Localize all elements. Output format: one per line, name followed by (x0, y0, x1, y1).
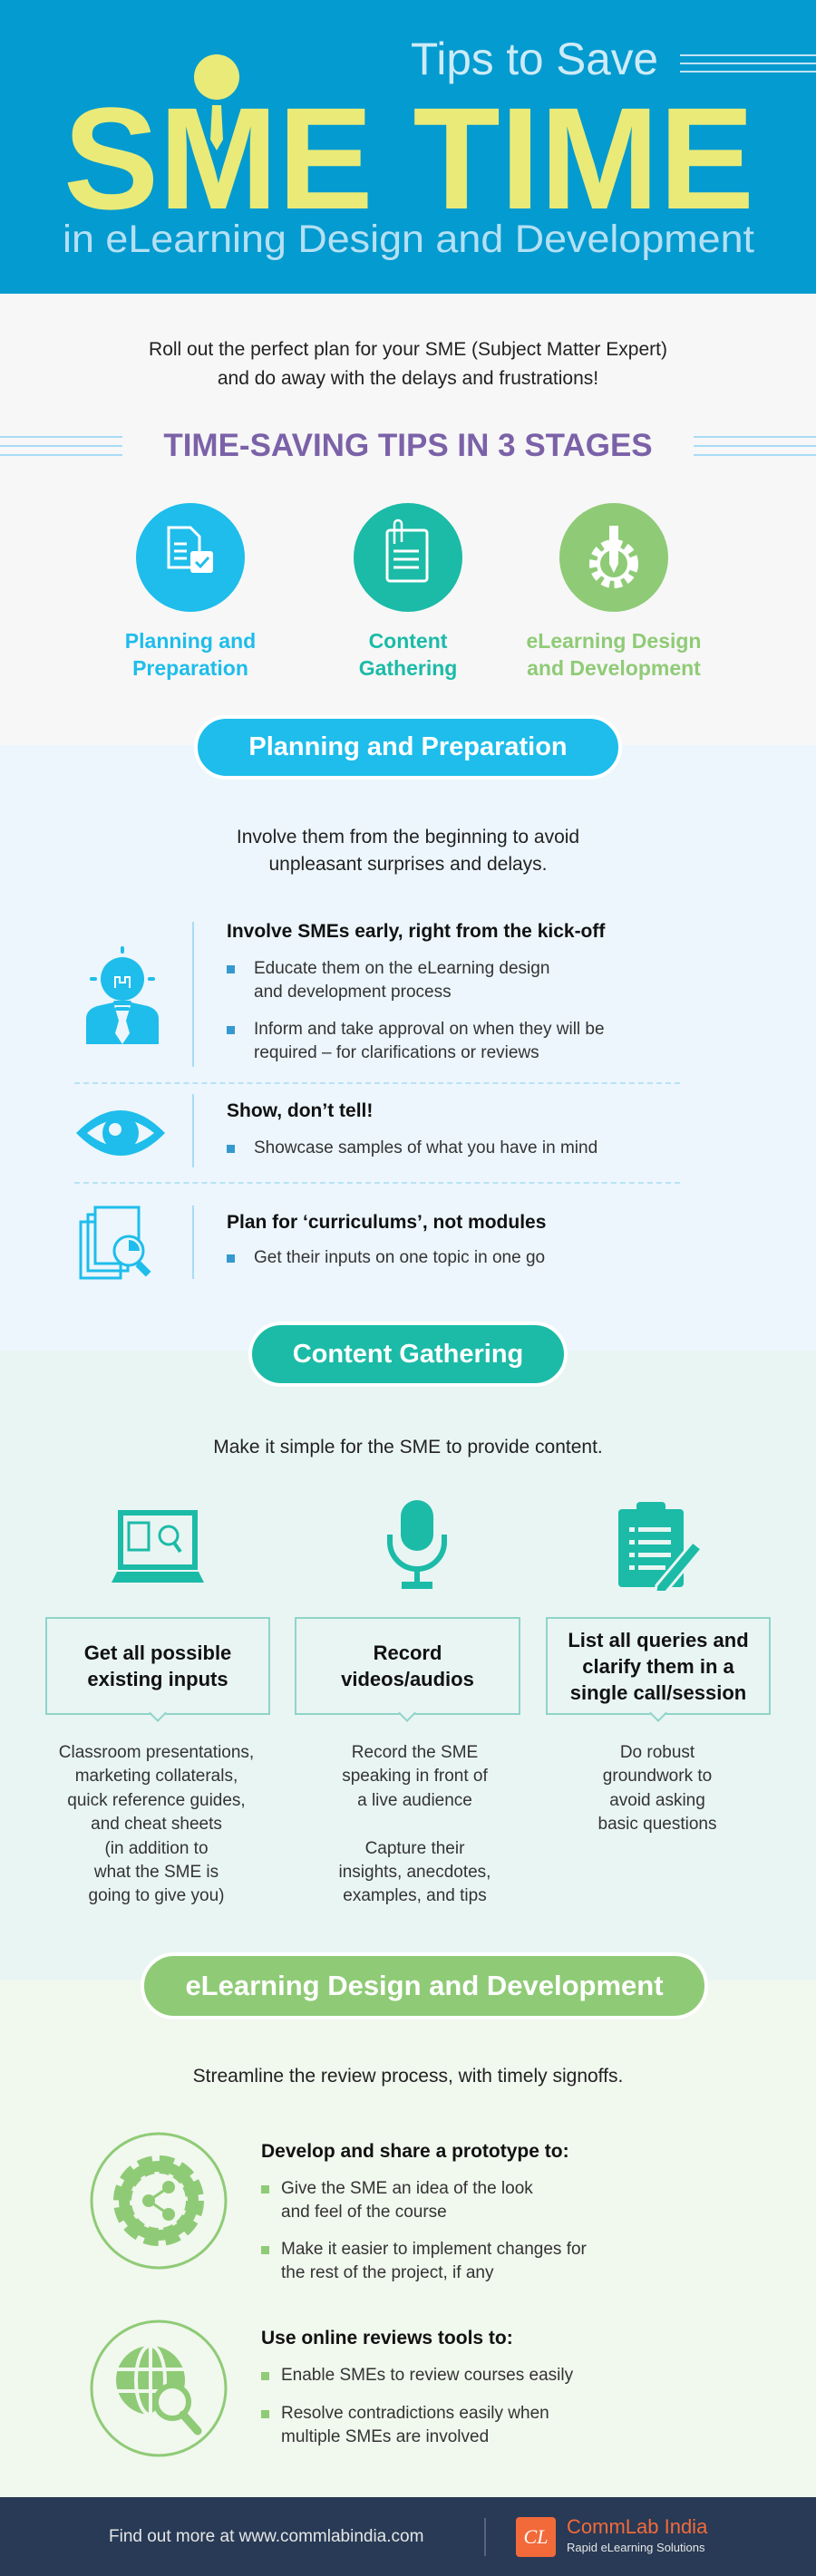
heading pill: planning: Planning and Preparation (248, 732, 568, 761)
title: tips to save: Tips to Save (411, 34, 658, 84)
tip: prototype: and feel of the course (281, 2203, 447, 2222)
text: record description: examples, and tips (343, 1886, 487, 1905)
box: list queries: List all queries and (568, 1628, 749, 1651)
tip: prototype: the rest of the project, if any (281, 2263, 493, 2282)
tip: online review tools: Enable SMEs to review courses easily (281, 2366, 573, 2385)
tip 2: Showcase samples of what you have in mind (254, 1138, 597, 1157)
text: record description: speaking in front of (342, 1767, 488, 1786)
stage icons (136, 503, 668, 612)
box: existing inputs: Get all possible (84, 1641, 231, 1664)
stage labels (125, 629, 256, 680)
tip 1: and development process (254, 983, 452, 1002)
subtitle: in eLearning Design and Development (63, 218, 754, 261)
stage labels: Planning and (125, 629, 256, 653)
icon: content (354, 503, 462, 612)
tip 1 (192, 921, 606, 1067)
box: list queries: single call/session (570, 1680, 746, 1704)
box: record (295, 1617, 520, 1722)
panel: eLearning design and development (0, 1980, 816, 2497)
tip 3: Plan for ‘curriculums’, not modules (227, 1212, 546, 1233)
logo: CL (524, 2525, 548, 2548)
text: queries description (598, 1743, 716, 1834)
heading: Involve SMEs early, right from the kick-off (227, 921, 605, 942)
tip 1: Educate them on the eLearning design (254, 959, 549, 978)
title: SME TIME: SME TIME (63, 77, 754, 239)
tip: prototype: Make it easier to implement changes for (281, 2240, 587, 2259)
text: and Development (527, 656, 701, 680)
footer (0, 2497, 816, 2576)
footer text: Find out more at www.commlabindia.com (109, 2527, 423, 2546)
box: list queries (546, 1617, 771, 1722)
icon: design (559, 503, 668, 612)
tip: online review tools (261, 2328, 573, 2446)
text: inputs description: (in addition to (104, 1839, 209, 1858)
intro (237, 827, 579, 875)
text: inputs description (59, 1743, 254, 1905)
text: queries description: basic questions (598, 1815, 716, 1834)
heading pill: design: eLearning Design and Development (185, 1970, 664, 2001)
heading pill: design (141, 1952, 708, 2019)
tip: prototype (261, 2141, 587, 2282)
icon: planning (136, 503, 245, 612)
intro: Involve them from the beginning to avoid (237, 827, 579, 847)
icon: person head with tie (194, 54, 239, 156)
icon: documents with magnifier (80, 1206, 151, 1280)
tip: online review tools: Resolve contradictions easily when (281, 2404, 549, 2423)
tip 2 (192, 1094, 597, 1167)
box: existing inputs: existing inputs (87, 1668, 228, 1690)
tip: online review tools: Use online reviews tools to: (261, 2328, 513, 2348)
stage labels: Preparation (132, 656, 248, 680)
text: record description: insights, anecdotes, (339, 1863, 491, 1882)
text: eLearning Design (526, 629, 701, 653)
text: inputs description: and cheat sheets (91, 1815, 222, 1834)
header banner (0, 0, 816, 294)
icon: laptop (112, 1510, 204, 1583)
text: inputs description: quick reference guides, (67, 1791, 246, 1810)
logo (516, 2515, 707, 2557)
intro: unpleasant surprises and delays. (268, 854, 548, 875)
icon: eye (76, 1110, 165, 1156)
heading pill: content gathering (248, 1322, 568, 1387)
panel: planning and preparation (0, 745, 816, 1351)
icon: microphone (387, 1500, 447, 1589)
stages heading: TIME-SAVING TIPS IN 3 STAGES (163, 428, 653, 463)
text: record description (339, 1743, 491, 1905)
text: inputs description: going to give you) (89, 1886, 225, 1905)
text: inputs description: what the SME is (94, 1863, 219, 1882)
icon: lightbulb person (86, 946, 159, 1044)
intro text: and do away with the delays and frustrations! (218, 368, 598, 389)
box: record: videos/audios (341, 1668, 474, 1690)
intro: Make it simple for the SME to provide content. (213, 1437, 603, 1457)
logo: CommLab India (567, 2515, 707, 2538)
text: record description: a live audience (357, 1791, 472, 1810)
heading pill: content gathering: Content Gathering (293, 1340, 523, 1369)
icon: gear share (91, 2132, 227, 2270)
tip 3 (192, 1206, 546, 1279)
panel: content gathering (0, 1351, 816, 1980)
logo: Rapid eLearning Solutions (567, 2541, 705, 2554)
tip: prototype: Develop and share a prototype to: (261, 2141, 569, 2162)
text: queries description: avoid asking (609, 1791, 705, 1810)
text: queries description: groundwork to (603, 1767, 712, 1786)
text: queries description: Do robust (620, 1743, 695, 1762)
tip 3: Get their inputs on one topic in one go (254, 1248, 545, 1267)
tip 1: required – for clarifications or reviews (254, 1043, 539, 1062)
box: existing inputs (45, 1617, 270, 1722)
icon: clipboard (618, 1502, 700, 1591)
tip: prototype: Give the SME an idea of the look (281, 2179, 533, 2198)
box: list queries: clarify them in a (582, 1655, 734, 1677)
intro text (149, 339, 667, 389)
tip 2: Show, don’t tell! (227, 1100, 373, 1121)
text: inputs description: marketing collaterals, (75, 1767, 238, 1786)
text: Content (369, 629, 447, 653)
tip: online review tools: multiple SMEs are involved (281, 2427, 489, 2446)
text: record description: Capture their (365, 1839, 464, 1858)
tip 1: Inform and take approval on when they will be (254, 1020, 605, 1039)
heading pill: planning (194, 715, 622, 780)
text: record description: Record the SME (352, 1743, 478, 1762)
intro: Streamline the review process, with timely signoffs. (193, 2066, 623, 2087)
icon: globe search (91, 2320, 227, 2456)
box: record: Record (374, 1641, 442, 1664)
text: Gathering (359, 656, 457, 680)
intro text: Roll out the perfect plan for your SME (Subject Matter Expert) (149, 339, 667, 360)
text: inputs description: Classroom presentations, (59, 1743, 254, 1762)
